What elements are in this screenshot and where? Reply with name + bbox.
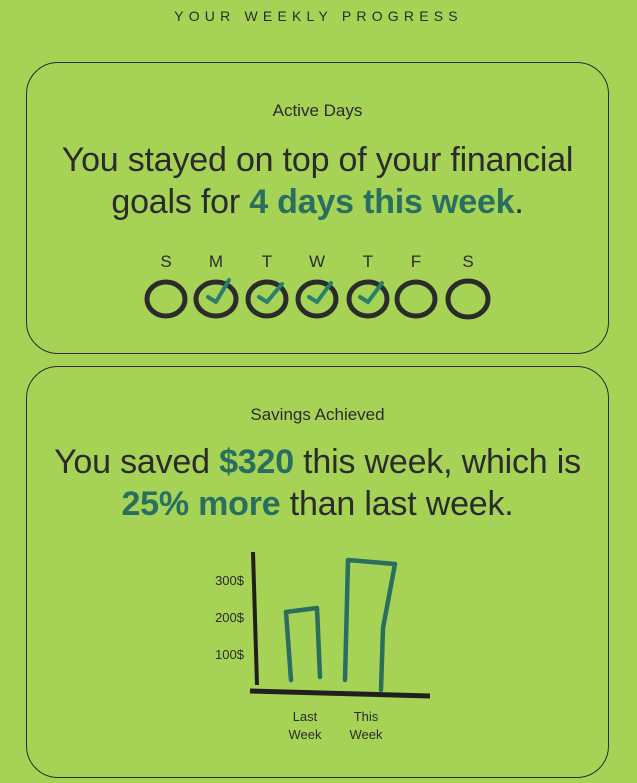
week tracker: S (160, 252, 172, 271)
text: active days statement (62, 141, 573, 221)
week tracker (144, 252, 490, 320)
week tracker: W (309, 252, 325, 271)
bar chart: Last (293, 709, 318, 724)
text: savings statement: 25% more than last week. (121, 485, 514, 523)
bar chart: This (354, 709, 379, 724)
heading: active days: Active Days (273, 101, 362, 120)
panel: active days (26, 62, 609, 354)
bar chart: 200$ (215, 610, 245, 625)
bar chart: 100$ (215, 647, 245, 662)
week tracker: T (262, 252, 272, 271)
text: savings statement (54, 443, 581, 523)
bar chart: Week (288, 727, 322, 742)
week tracker: S (462, 252, 474, 271)
heading: savings: Savings Achieved (250, 405, 385, 424)
week tracker: T (363, 252, 373, 271)
text: savings statement: You saved $320 this week, which is (54, 443, 581, 481)
week tracker: F (411, 252, 421, 271)
text: active days statement: goals for 4 days this week. (111, 183, 524, 221)
panel: savings achieved (26, 366, 609, 778)
title: YOUR WEEKLY PROGRESS (174, 8, 463, 24)
bar chart: 300$ (215, 573, 245, 588)
bar chart: Week (350, 727, 383, 742)
bar chart (215, 552, 430, 742)
text: active days statement: You stayed on top of your financial (62, 141, 573, 179)
week tracker: M (209, 252, 223, 271)
